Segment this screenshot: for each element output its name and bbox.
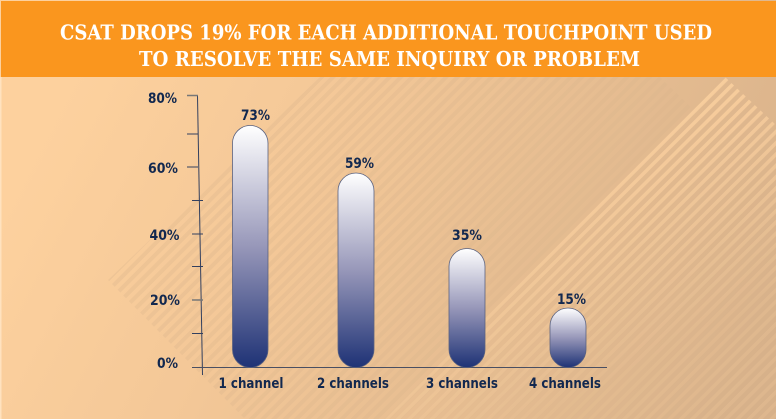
bar: 1 channel 73% bbox=[218, 108, 284, 392]
bar: 1 channel 73%: 1 channel bbox=[218, 376, 284, 392]
y axis labels: 60% bbox=[148, 161, 178, 177]
y axis labels bbox=[148, 91, 180, 372]
bar: 3 channels 35% bbox=[426, 228, 498, 392]
bar: 4 channels 15%: 4 channels bbox=[529, 376, 601, 392]
bar: 4 channels 15% bbox=[529, 292, 601, 392]
bar: 1 channel 73%: 73% bbox=[241, 108, 270, 124]
bar: 3 channels 35%: 35% bbox=[452, 228, 482, 244]
bar: 4 channels 15%: 15% bbox=[557, 292, 586, 308]
y axis labels: 0% bbox=[157, 356, 178, 372]
header banner bbox=[1, 1, 776, 77]
title: TO RESOLVE THE SAME INQUIRY OR PROBLEM bbox=[139, 47, 640, 71]
y axis labels: 20% bbox=[150, 293, 180, 309]
bar: 2 channels 59% bbox=[317, 156, 389, 392]
bar: 2 channels 59%: 2 channels bbox=[317, 376, 389, 392]
y axis bbox=[187, 96, 607, 375]
bar: 3 channels 35%: 3 channels bbox=[426, 376, 498, 392]
bar: 2 channels 59%: 59% bbox=[345, 156, 374, 172]
y axis labels: 80% bbox=[148, 91, 177, 107]
y axis labels: 40% bbox=[150, 228, 180, 244]
title bbox=[60, 20, 712, 71]
